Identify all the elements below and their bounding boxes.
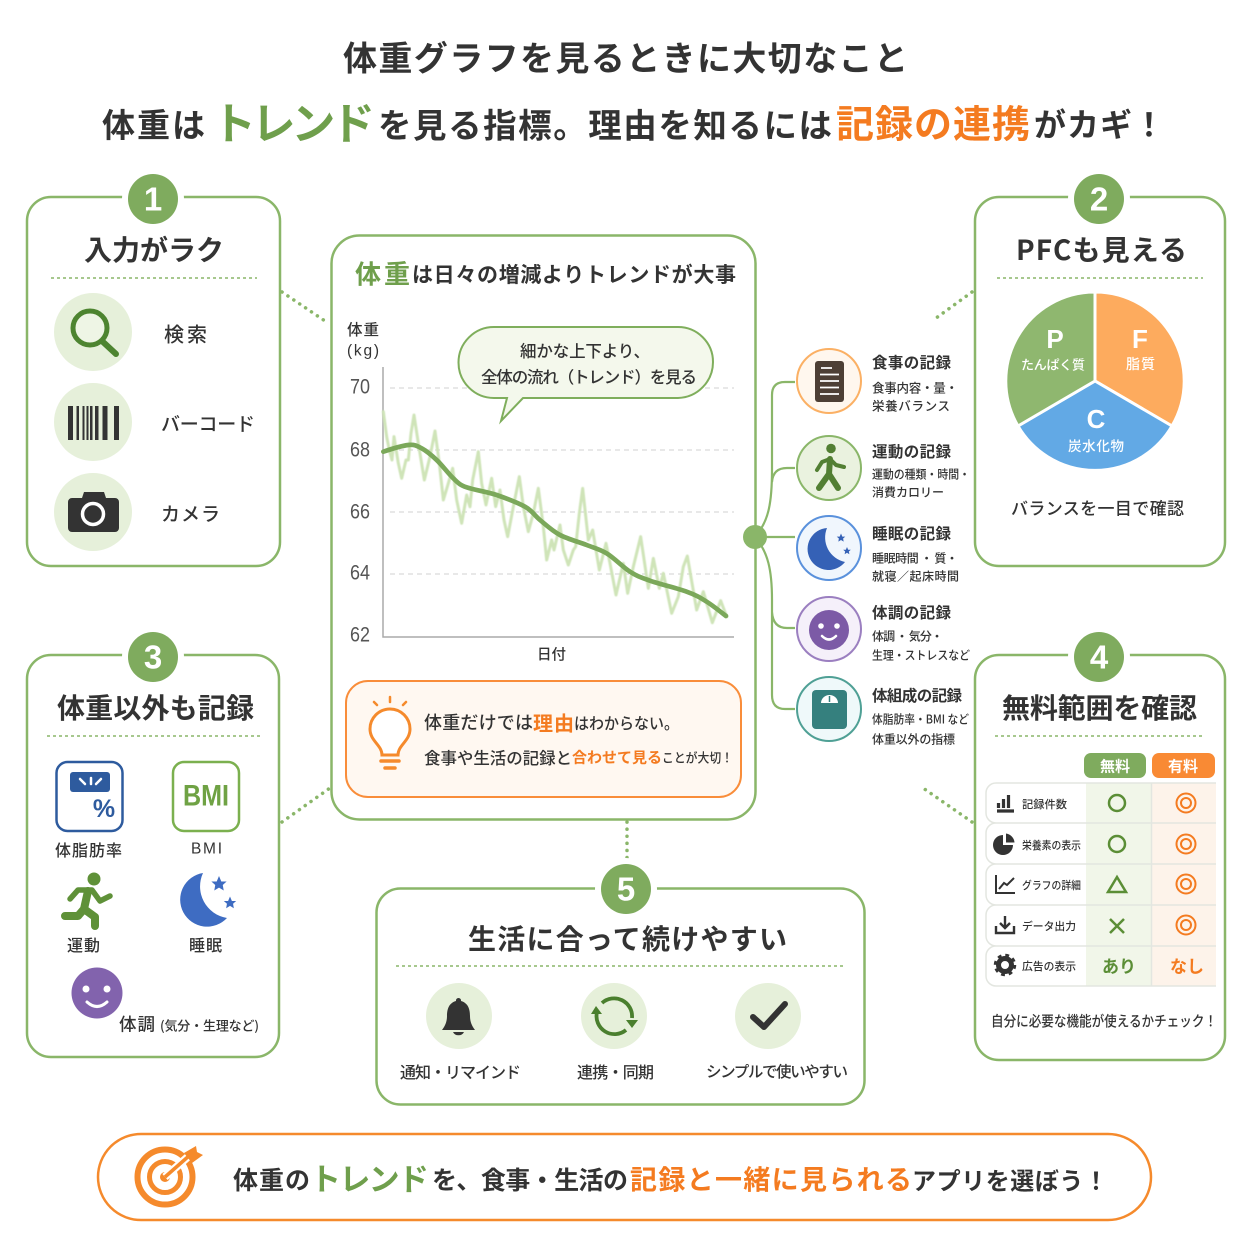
icon: search <box>54 293 132 371</box>
record: body composition: 体脂肪率・BMI など <box>872 710 969 728</box>
badge 3: 3 <box>144 638 162 676</box>
paid marks <box>1176 794 1196 934</box>
heading <box>355 254 736 292</box>
pie chart <box>1006 292 1184 470</box>
heading: 体重以外も記録 <box>57 687 254 727</box>
icon: pie <box>993 834 1014 855</box>
panel 4: free range <box>975 626 1225 1060</box>
panel 3: other records <box>27 626 279 1057</box>
caption: バランスを一目で確認 <box>1011 494 1184 520</box>
badge 5: 5 <box>617 870 635 908</box>
connector dots <box>282 292 972 862</box>
title: がカギ！ <box>1034 100 1165 146</box>
row label: グラフの詳細 <box>1022 877 1081 893</box>
callout text: 合わせて見る <box>572 746 662 768</box>
text: yes: あり <box>1102 952 1136 978</box>
title: を見る指標。理由を知るには <box>378 98 832 148</box>
record tree connectors <box>743 382 795 709</box>
pie chart: 脂質 <box>1126 354 1155 374</box>
badge 1 <box>122 168 184 230</box>
line chart: 62 <box>350 624 370 646</box>
line chart: 64 <box>350 562 370 584</box>
heading: 体重 <box>355 254 410 292</box>
record: meal <box>797 349 958 414</box>
badge 1: 1 <box>144 180 162 218</box>
line chart: 70 <box>350 376 370 398</box>
panel 1: input <box>27 168 280 566</box>
icon: bell <box>426 983 492 1049</box>
text: none: なし <box>1170 952 1204 978</box>
speech bubble: 全体の流れ（トレンド）を見る <box>481 364 697 388</box>
callout text: はわからない。 <box>574 710 679 734</box>
row label: 広告の表示 <box>1022 958 1076 974</box>
icon: gear <box>996 956 1014 974</box>
icon: barcode <box>54 383 132 461</box>
line chart: (kg) <box>347 342 379 360</box>
heading: PFCも見える <box>1016 229 1187 269</box>
banner text: アプリを選ぼう！ <box>912 1162 1108 1196</box>
record: meal: 食事内容・量・ <box>872 378 958 396</box>
title: 体重は <box>102 99 205 147</box>
icon: camera <box>54 473 132 551</box>
label: シンプルで使いやすい <box>706 1060 848 1082</box>
title: トレンド <box>212 88 375 152</box>
record: condition: 体調の記録 <box>872 601 951 623</box>
pie chart: たんぱく質 <box>1021 354 1085 374</box>
record: exercise: 消費カロリー <box>872 484 944 500</box>
icon: face <box>797 597 861 661</box>
record: condition <box>797 597 970 664</box>
label: 睡眠 <box>189 932 222 956</box>
icon: download <box>996 916 1014 933</box>
speech bubble <box>458 327 713 421</box>
label: search: 検索 <box>164 318 207 348</box>
heading: 生活に合って続けやすい <box>468 918 787 958</box>
record: meal: 食事の記録 <box>872 351 951 373</box>
label: 連携・同期 <box>577 1059 654 1083</box>
panel: center chart <box>332 236 756 820</box>
title: 体重グラフを見るときに大切なこと <box>343 32 908 80</box>
callout text: 食事や生活の記録と <box>424 745 572 769</box>
pie chart: F <box>1132 324 1148 354</box>
row label: データ出力 <box>1022 918 1076 934</box>
free marks <box>1108 795 1126 933</box>
label: (気分・生理など) <box>160 1016 259 1034</box>
record: exercise: 運動の記録 <box>872 440 951 462</box>
heading: 入力がラク <box>84 229 224 269</box>
record: sleep <box>797 516 959 584</box>
badge 2 <box>1068 168 1130 230</box>
badge 5 <box>595 858 657 920</box>
callout text: 理由 <box>533 708 574 736</box>
record: sleep: 就寝／起床時間 <box>872 568 959 584</box>
heading: 無料範囲を確認 <box>1002 687 1197 727</box>
icon: bulb <box>370 697 410 768</box>
record: body composition: 体組成の記録 <box>872 684 962 706</box>
record: condition: 体調 ・ 気分・ <box>872 628 943 644</box>
icon: body fat: % <box>93 795 115 823</box>
bottom banner <box>98 1134 1151 1220</box>
label: barcode: バーコード <box>161 410 255 436</box>
record: exercise <box>797 436 970 500</box>
label: BMI <box>191 840 222 858</box>
heading: は日々の増減よりトレンドが大事 <box>412 259 736 289</box>
pie chart: P <box>1046 324 1064 354</box>
banner text: トレンド <box>310 1154 429 1200</box>
badge 4 <box>1068 626 1130 688</box>
banner text: 体重の <box>233 1161 310 1197</box>
line chart: 日付 <box>537 644 566 664</box>
row label: 記録件数 <box>1022 796 1067 812</box>
icon: BMI: BMI <box>183 780 229 812</box>
record: body composition: 体重以外の指標 <box>872 730 955 748</box>
callout text: 体重だけでは <box>424 709 533 735</box>
icon: scale <box>797 677 861 741</box>
title <box>102 32 1165 152</box>
comparison table <box>986 783 1216 986</box>
banner text <box>233 1154 1108 1200</box>
title: 記録の連携 <box>836 94 1030 148</box>
pill: paid <box>1152 753 1215 778</box>
icon: check <box>735 983 801 1049</box>
badge 3 <box>122 626 184 688</box>
pie chart: 炭水化物 <box>1068 435 1124 455</box>
badge 2: 2 <box>1090 180 1108 218</box>
banner text: を、食事・生活の <box>432 1161 628 1197</box>
icon: body fat <box>56 762 122 831</box>
line chart <box>347 318 734 664</box>
label: 体調 <box>119 1012 155 1036</box>
label: 通知・リマインド <box>400 1059 521 1083</box>
banner text: 記録と一緒に見られる <box>630 1158 912 1198</box>
record: sleep: 睡眠の記録 <box>872 522 951 544</box>
icon: bars <box>997 795 1014 811</box>
icon: line chart <box>996 875 1015 893</box>
record: condition: 生理・ストレスなど <box>872 646 970 664</box>
pill: free <box>1084 753 1146 778</box>
pie chart: C <box>1087 404 1106 434</box>
icon: face <box>72 968 122 1018</box>
label: 運動 <box>67 932 100 956</box>
record: sleep: 睡眠時間 ・ 質・ <box>872 550 958 566</box>
speech bubble: 細かな上下より、 <box>520 338 650 362</box>
callout text <box>424 708 733 769</box>
line chart: 68 <box>350 438 370 462</box>
callout <box>346 681 741 797</box>
callout text: ことが大切！ <box>662 748 733 766</box>
line chart: 体重 <box>347 318 379 340</box>
icon: moon <box>797 516 861 580</box>
icon: meal <box>797 349 861 413</box>
icon: target <box>138 1146 203 1204</box>
label <box>119 1012 259 1036</box>
icon: walker <box>797 436 861 500</box>
record: exercise: 運動の種類・時間・ <box>872 466 970 482</box>
icon: runner <box>65 872 110 926</box>
pill: paid: 有料 <box>1168 756 1198 776</box>
line chart: 66 <box>350 500 370 524</box>
record: meal: 栄養バランス <box>872 396 950 414</box>
label: 体脂肪率 <box>55 837 122 861</box>
label: camera: カメラ <box>161 500 220 526</box>
icon: BMI <box>173 762 239 831</box>
icon: sync <box>581 983 647 1049</box>
caption: 自分に必要な機能が使えるかチェック！ <box>991 1010 1217 1032</box>
row label: 栄養素の表示 <box>1022 837 1081 853</box>
panel 2: PFC <box>975 168 1225 566</box>
panel 5: lifestyle <box>376 858 864 1104</box>
pill: free: 無料 <box>1100 756 1130 776</box>
icon: moon <box>180 873 236 927</box>
badge 4: 4 <box>1090 638 1109 676</box>
record: body composition <box>797 677 969 748</box>
